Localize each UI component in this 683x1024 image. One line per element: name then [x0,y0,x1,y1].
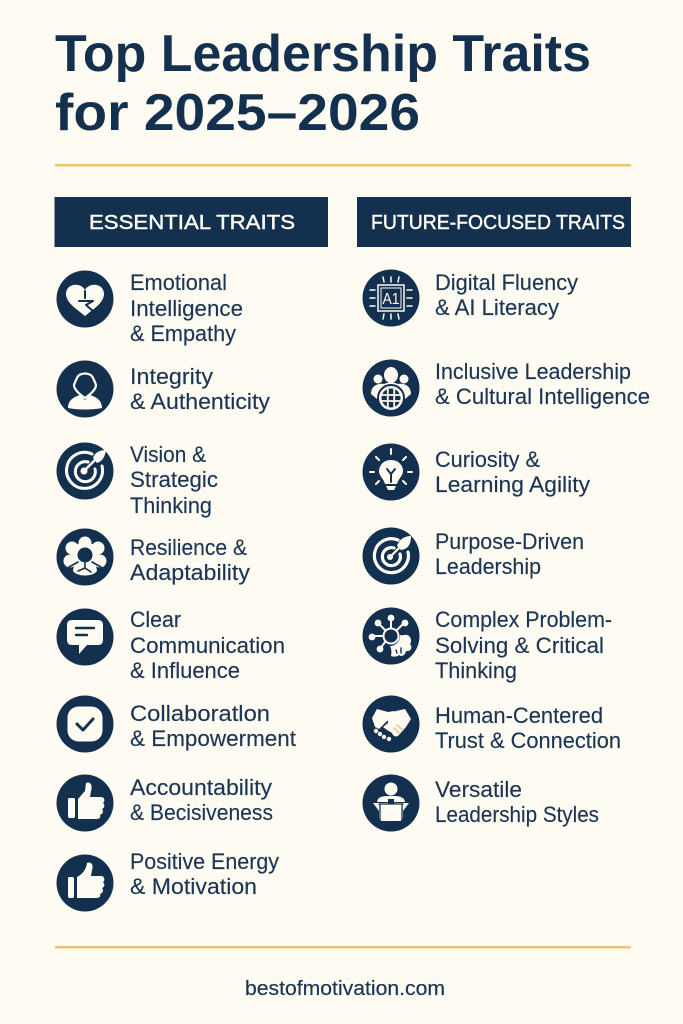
title: for 2025–2026 [55,84,420,142]
title [55,25,591,142]
trait: vision: Thinking [130,493,212,518]
trait: digital fluency: & AI Literacy [435,295,559,320]
trait: integrity: & Authenticity [130,389,270,414]
trait: inclusive leadership: Inclusive Leadership [435,359,631,384]
trait: resilience: Resilience & [130,535,247,560]
trait: positive energy [56,849,279,912]
trait: complex problem solving: Complex Problem- [435,607,612,632]
trait: collaboration [56,696,296,752]
trait: curiosity: Curiosity & [435,447,540,472]
icon: heart [56,270,114,328]
icon: people with globe [362,360,420,416]
trait: purpose-driven: Leadership [435,554,541,579]
trait: human-centered trust: Human-Centered [435,703,603,728]
icon: AI chip: A1 [382,291,400,308]
trait: accountability: & Becisiveness [130,800,273,825]
trait: emotional intelligence: Emotional [130,270,227,295]
trait: versatile leadership: Leadership Styles [435,802,599,827]
icon: check badge [56,696,114,752]
icon: speech bubble [56,608,114,666]
panel: essential traits [54,197,328,912]
trait: resilience [56,528,250,586]
icon: person [56,360,114,418]
trait: collaboration: & Empowerment [130,726,296,751]
trait: collaboration: Collaboratlon [130,701,270,726]
icon: target with leaf [362,528,420,584]
trait: complex problem solving: Solving & Critical [435,633,604,658]
icon: person at podium [362,774,420,832]
icon: light bulb [362,444,420,500]
trait: vision [56,442,218,518]
trait: vision: Strategic [130,467,218,492]
title: Top Leadership Traits [55,25,591,83]
trait: vision: Vision & [130,442,206,467]
trait: accountability [56,774,273,832]
trait: human-centered trust [362,696,621,753]
icon: handshake [362,696,420,752]
heading: future-focused traits: FUTURE-FOCUSED TRAITS [371,211,625,234]
trait: digital fluency [362,270,578,326]
trait: emotional intelligence [56,270,243,346]
trait: human-centered trust: Trust & Connection [435,728,621,753]
trait: curiosity [362,444,590,500]
trait: purpose-driven [362,528,584,584]
trait: positive energy: Positive Energy [130,849,279,874]
heading: essential traits [54,197,328,247]
trait: purpose-driven: Purpose-Driven [435,529,584,554]
trait: clear communication: & Influence [130,658,240,683]
trait: curiosity: Learning Agility [435,472,590,497]
trait: inclusive leadership: & Cultural Intelligence [435,384,650,409]
trait: emotional intelligence: Intelligence [130,296,243,321]
icon: thumbs up [56,774,114,832]
trait: resilience: Adaptability [130,560,250,585]
trait: positive energy: & Motivation [130,874,257,899]
heading: future-focused traits [357,197,631,247]
trait: versatile leadership [362,774,599,832]
trait: clear communication [56,607,285,683]
trait: versatile leadership: Versatile [435,777,522,802]
heading: essential traits: ESSENTIAL TRAITS [89,211,295,234]
icon: flower gear [56,528,114,586]
trait: inclusive leadership [362,359,650,416]
icon: target with dart [56,442,114,500]
trait: clear communication: Clear [130,607,181,632]
footer: website: bestofmotivation.com [245,978,445,1000]
trait: integrity: Integrity [130,364,213,389]
trait: emotional intelligence: & Empathy [130,321,236,346]
trait: integrity [56,360,270,418]
trait: accountability: Accountability [130,775,272,800]
icon: thumbs up [56,854,114,912]
icon: AI chip [362,270,420,326]
trait: clear communication: Communication [130,633,285,658]
panel: future-focused traits [357,197,650,832]
icon: network and puzzle [362,608,420,664]
trait: complex problem solving [362,607,612,683]
trait: digital fluency: Digital Fluency [435,270,578,295]
trait: complex problem solving: Thinking [435,658,517,683]
